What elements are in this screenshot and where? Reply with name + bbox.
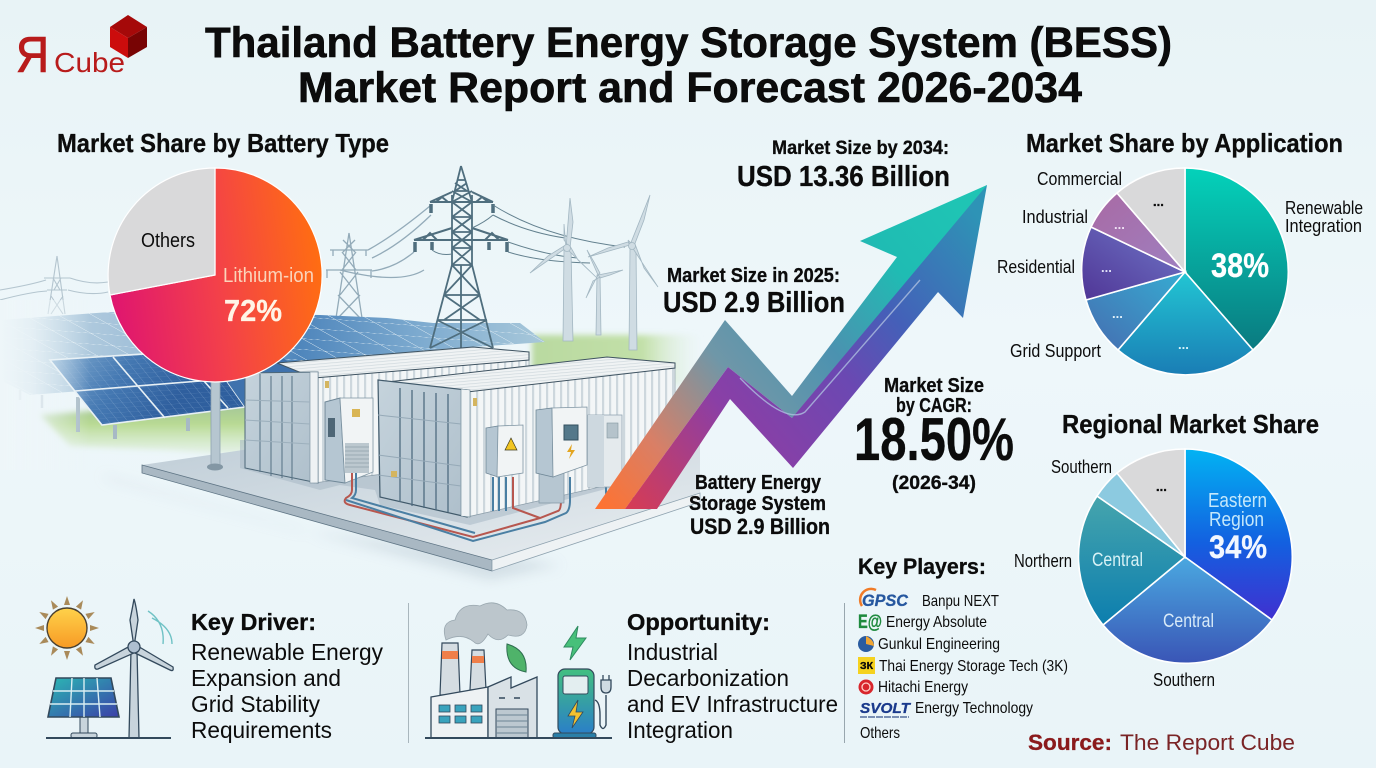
battery container rear (245, 347, 529, 483)
logo: 3K: ЗК (860, 661, 874, 672)
inverter cabinet 1 (325, 398, 373, 483)
heading: Key Players: (858, 554, 986, 579)
pie chart: regional market share: Southern (1051, 457, 1112, 477)
opportunity text: and EV Infrastructure (627, 691, 838, 717)
pie chart: market share by application: ... (1178, 337, 1189, 352)
pie chart: regional market share: Northern (1014, 551, 1072, 571)
auxiliary cabinet (588, 415, 622, 487)
pie chart: market share by application: Grid Support (1010, 341, 1101, 361)
pie chart: regional market share: Southern (1153, 670, 1215, 690)
logo: Energy Absolute: E@ (858, 612, 882, 633)
key players list (858, 554, 1068, 742)
pie chart: market share by application: 38% (1211, 247, 1269, 285)
logo: Gunkul (858, 636, 874, 652)
logo: RCube: Cube (54, 47, 125, 78)
opportunity text: Integration (627, 717, 733, 743)
growth arrow (595, 185, 987, 509)
grass (40, 335, 702, 456)
market size 2034 callout: Market Size by 2034: (772, 138, 949, 159)
solar panels back rows (0, 312, 545, 408)
pole (207, 378, 223, 470)
key players list: Thai Energy Storage Tech (3K) (879, 658, 1068, 675)
key driver text: Renewable Energy (191, 639, 383, 665)
inverter cabinet 2 (536, 407, 587, 503)
CAGR callout: 18.50% (854, 406, 1014, 473)
opportunity text: Decarbonization (627, 665, 789, 691)
battery energy storage system callout: USD 2.9 Billion (690, 514, 830, 539)
pie chart: market share by application: Integration (1285, 216, 1362, 236)
pie chart: regional market share: Region (1209, 509, 1264, 531)
pie chart: regional market share: 34% (1209, 529, 1267, 565)
title: Market Report and Forecast 2026-2034 (298, 64, 1082, 112)
battery container front (378, 357, 675, 517)
logo: 3K (858, 657, 875, 674)
pie chart: market share by application (997, 128, 1363, 375)
market size 2034 callout (737, 138, 950, 193)
opportunity text: Industrial (627, 639, 718, 665)
key players list: Banpu NEXT (922, 593, 999, 610)
market size 2025 callout (663, 265, 845, 319)
far power tower (0, 256, 108, 314)
heading: Market Share by Application (1026, 128, 1343, 158)
logo: SVOLT: SVOLT (860, 700, 912, 717)
heading: Market Share by Battery Type (57, 128, 389, 158)
battery energy storage system callout (689, 472, 830, 539)
power lines (432, 205, 625, 263)
heading: Regional Market Share (1062, 409, 1319, 439)
source: Source: (1028, 730, 1112, 755)
battery energy storage system callout: Storage System (689, 493, 826, 515)
market size 2025 callout: Market Size in 2025: (667, 265, 840, 287)
key players list: Gunkul Engineering (878, 636, 1000, 653)
pie chart: market share by application: Industrial (1022, 207, 1088, 227)
key driver text (191, 609, 383, 743)
divider (408, 603, 410, 743)
pie chart: market share by battery type: 72% (224, 293, 282, 328)
pie chart: regional market share: Central (1163, 611, 1214, 632)
pie chart: regional market share: Central (1092, 550, 1143, 571)
pie chart: market share by application: ... (1114, 217, 1125, 232)
middle power tower (326, 206, 431, 318)
pie chart: market share by application: Residential (997, 257, 1075, 277)
CAGR callout: (2026-34) (892, 473, 976, 494)
CAGR callout: by CAGR: (896, 395, 972, 417)
pie chart: regional market share (1014, 409, 1319, 690)
key driver text: Grid Stability (191, 691, 320, 717)
CAGR callout: Market Size (884, 375, 984, 397)
pie chart: regional market share: Eastern (1208, 490, 1267, 512)
logo: RCube (16, 15, 147, 83)
source (1028, 730, 1295, 755)
key driver text: Expansion and (191, 665, 341, 691)
pie chart: regional market share: ... (1156, 479, 1167, 494)
divider (844, 603, 846, 743)
key players list: Others (860, 725, 900, 742)
icon: factory with EV charger (425, 603, 612, 738)
main power tower (414, 166, 508, 348)
warning junction box (486, 425, 523, 477)
illustration: solar farm, grid and battery containers (0, 166, 702, 580)
logo: GPSC: GPSC (862, 591, 909, 610)
pie chart: market share by battery type: Others (141, 230, 195, 252)
pie chart: market share by application: ... (1153, 194, 1164, 209)
solar panels front row (50, 340, 300, 439)
wind turbines (530, 195, 658, 350)
key driver text: Key Driver: (191, 609, 316, 635)
logo: Hitachi (858, 680, 874, 694)
pie chart: market share by application: Renewable (1285, 198, 1363, 218)
key driver text: Requirements (191, 717, 332, 743)
pie chart: market share by application: Commercial (1037, 169, 1122, 189)
battery energy storage system callout: Battery Energy (695, 472, 822, 494)
title (205, 19, 1172, 112)
concrete platform (142, 440, 700, 571)
market size 2034 callout: USD 13.36 Billion (737, 161, 950, 193)
market size 2025 callout: USD 2.9 Billion (663, 287, 845, 319)
pie chart: market share by application: ... (1101, 260, 1112, 275)
title: Thailand Battery Energy Storage System (BESS) (205, 19, 1172, 67)
platform shadow (100, 475, 560, 580)
logo: RCube: Я (16, 27, 49, 83)
source: The Report Cube (1120, 730, 1295, 755)
icon: renewable energy sun, turbine and solar panel (35, 596, 173, 738)
pie chart: market share by battery type (57, 128, 389, 382)
CAGR callout (854, 375, 1014, 494)
key players list: Energy Absolute (886, 614, 987, 631)
container shadow (240, 440, 660, 525)
key players list: Hitachi Energy (878, 679, 968, 696)
key players list: Energy Technology (915, 700, 1033, 717)
cables (345, 473, 640, 541)
opportunity text (627, 609, 838, 743)
pie chart: market share by application: ... (1112, 306, 1123, 321)
opportunity text: Opportunity: (627, 609, 770, 635)
pie chart: market share by battery type: Lithium-ion (223, 265, 314, 287)
